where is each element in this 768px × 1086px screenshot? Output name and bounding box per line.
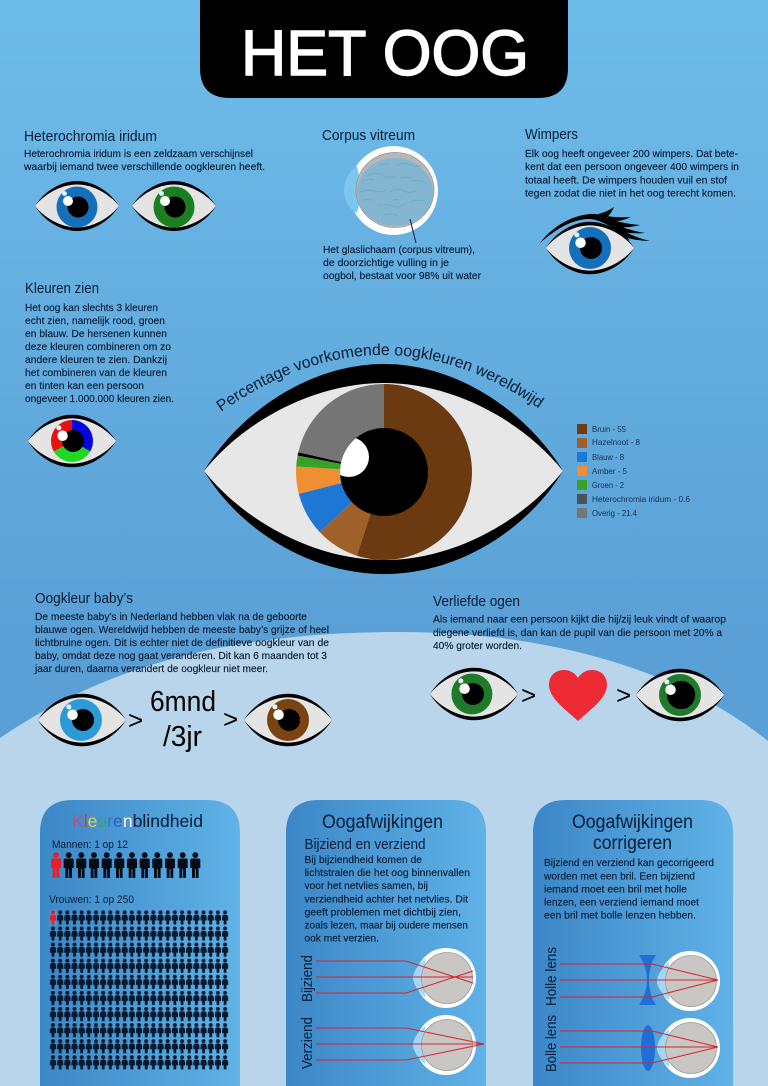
text block xyxy=(23,148,265,173)
text block: blauwe ogen. Wereldwijd hebben de meeste baby’s grijze of heel xyxy=(35,624,329,636)
text block: voor het netvlies samen, bij xyxy=(304,880,428,892)
heading: Kleuren zien xyxy=(25,281,99,297)
label: 6 months to 3 years: 6mnd xyxy=(150,686,216,718)
pictogram: men xyxy=(51,852,200,878)
arrow: > xyxy=(521,680,536,710)
section: heterochromia iridum xyxy=(23,129,265,231)
heading: Oogafwijkingen xyxy=(322,812,443,833)
arrow: > xyxy=(128,705,143,735)
text block: ook met verzien. xyxy=(304,932,379,944)
label: vrouwen: Vrouwen: 1 op 250 xyxy=(49,894,134,906)
icon: heart xyxy=(549,670,607,721)
text block: oogbol, bestaat voor 98% uit water xyxy=(323,270,481,282)
text block: 40% groter worden. xyxy=(433,640,522,652)
text block: en tinten kan een persoon xyxy=(25,380,144,392)
text block: andere kleuren te zien. Dankzij xyxy=(25,354,167,366)
section: wimpers xyxy=(525,127,739,274)
icon: blue eye xyxy=(35,181,119,231)
text block: baby, omdat deze nog gaat veranderen. Dit kan 6 maanden tot 3 xyxy=(35,650,327,662)
title banner xyxy=(200,0,568,98)
legend: Blauw - 8 xyxy=(592,452,624,462)
heading: corrigeren xyxy=(593,833,672,854)
text block: tegen zodat die niet in het oog terecht komen. xyxy=(525,188,736,200)
text block: Als iemand naar een persoon kijkt die hij/zij leuk vindt of waarop xyxy=(433,614,726,626)
text block: echt zien, namelijk rood, groen xyxy=(25,315,165,327)
section: eye colour chart xyxy=(204,344,690,574)
heading: Verliefde ogen xyxy=(433,594,520,610)
icon: green eye large pupil xyxy=(636,669,724,721)
legend: Overig - 21.4 xyxy=(592,508,637,518)
panel: oogafwijkingen xyxy=(286,800,486,1086)
heading: Kleurenblindheid xyxy=(72,811,203,831)
pictogram: women xyxy=(49,910,229,1070)
diagram: verziend: Verziend xyxy=(300,1017,316,1069)
icon: baby blue eye xyxy=(38,694,126,746)
legend: Groen - 2 xyxy=(592,480,624,490)
title: HET OOG xyxy=(241,17,529,89)
heading: Oogafwijkingen xyxy=(572,812,693,833)
diagram: bijziend xyxy=(300,948,476,1008)
donut chart xyxy=(296,384,472,560)
text block: ongeveer 1.000.000 kleuren zien. xyxy=(25,393,174,405)
text block: lichtbruine ogen. Dit is echter niet de definitieve oogkleur van de xyxy=(35,637,329,649)
section: verliefde ogen xyxy=(430,594,726,721)
diagram: holle lens xyxy=(544,947,720,1011)
heading: Oogkleur baby’s xyxy=(35,591,133,607)
diagram: holle lens: Holle lens xyxy=(544,947,560,1006)
text block: lenzen, een verziend iemand moet xyxy=(544,896,699,908)
label: mannen: Mannen: 1 op 12 xyxy=(52,839,128,851)
text block: De meeste baby’s in Nederland hebben vlak na de geboorte xyxy=(35,611,307,623)
text block xyxy=(304,854,470,944)
text block: jaar duren, daarna verandert de oogkleur niet meer. xyxy=(34,663,268,675)
label: 6 months to 3 years: /3jr xyxy=(163,721,202,753)
text block: zoals lezen, maar bij oudere mensen xyxy=(304,920,468,932)
text block: Elk oog heeft ongeveer 200 wimpers. Dat bete- xyxy=(525,148,738,160)
text block: Heterochromia iridum is een zeldzaam verschijnsel xyxy=(24,148,253,160)
diagram: bijziend: Bijziend xyxy=(300,955,316,1002)
text block xyxy=(323,244,481,282)
background hill xyxy=(0,632,768,1086)
text block: een bril met bolle lenzen hebben. xyxy=(544,910,696,922)
legend: Heterochromia iridum - 0.6 xyxy=(592,494,690,504)
icon: green eye xyxy=(132,181,216,231)
text block xyxy=(25,302,174,405)
icon: green eye small pupil xyxy=(430,668,518,720)
text block: lichtstralen die het oog binnenvallen xyxy=(304,867,470,879)
text block xyxy=(543,857,714,922)
text block: diegene verliefd is, dan kan de pupil van die persoon met 20% a xyxy=(433,627,722,639)
section: oogkleur baby's xyxy=(34,591,332,753)
panel: oogafwijkingen corrigeren xyxy=(533,800,733,1086)
background xyxy=(0,0,768,800)
text block: totaal heeft. De wimpers houden vuil en stof xyxy=(525,174,727,186)
legend: Bruin - 55 xyxy=(592,424,626,434)
text block: Het glaslichaam (corpus vitreum), xyxy=(323,244,475,256)
chart title: Percentage voorkomende oogkleuren wereldwijd xyxy=(216,344,544,412)
icon: brown eye xyxy=(244,694,332,746)
label: 6 months to 3 years xyxy=(150,686,216,753)
diagram: bolle lens xyxy=(544,1015,720,1078)
text block: kent dat een persoon ongeveer 400 wimpers in xyxy=(525,161,739,173)
arrow: > xyxy=(616,680,631,710)
text block: de doorzichtige vulling in je xyxy=(323,257,449,269)
text block: Bij bijziendheid komen de xyxy=(304,854,422,866)
large eye outline xyxy=(204,364,563,574)
text block: geeft problemen met dichtbij zien, xyxy=(304,906,461,918)
diagram: verziend xyxy=(300,1015,484,1075)
heading xyxy=(572,812,693,854)
subheading: Bijziend en verziend xyxy=(304,836,426,853)
heading: Wimpers xyxy=(525,127,578,143)
text block: het combineren van de kleuren xyxy=(25,367,167,379)
heading: Corpus vitreum xyxy=(322,128,415,144)
diagram: bolle lens: Bolle lens xyxy=(544,1015,560,1072)
text block: Bijziend en verziend kan gecorrigeerd xyxy=(544,857,714,869)
section: corpus vitreum xyxy=(322,128,481,282)
text block: verziendheid achter het netvlies. Dit xyxy=(304,894,468,906)
text block: waarbij iemand twee verschillende oogkleuren heeft. xyxy=(23,161,265,173)
legend: Amber - 5 xyxy=(592,466,627,476)
legend: Hazelnoot - 8 xyxy=(592,437,640,447)
icon: eye with lashes xyxy=(540,207,650,274)
text block: en blauw. De hersenen kunnen xyxy=(25,328,167,340)
text block: deze kleuren combineren om zo xyxy=(25,341,171,353)
arrow: > xyxy=(223,704,238,734)
text block: worden met een bril. Een bijziend xyxy=(543,870,695,882)
heading: Heterochromia iridum xyxy=(24,129,157,145)
icon: vitreous eyeball xyxy=(344,146,438,243)
text block xyxy=(433,614,726,652)
text block xyxy=(34,611,329,675)
text block: iemand moet een bril met holle xyxy=(544,884,687,896)
text block xyxy=(525,148,739,200)
icon: RGB eye xyxy=(28,415,116,467)
section: kleuren zien xyxy=(25,281,174,467)
panel: kleurenblindheid xyxy=(40,800,240,1086)
text block: Het oog kan slechts 3 kleuren xyxy=(25,302,158,314)
legend xyxy=(577,424,690,518)
